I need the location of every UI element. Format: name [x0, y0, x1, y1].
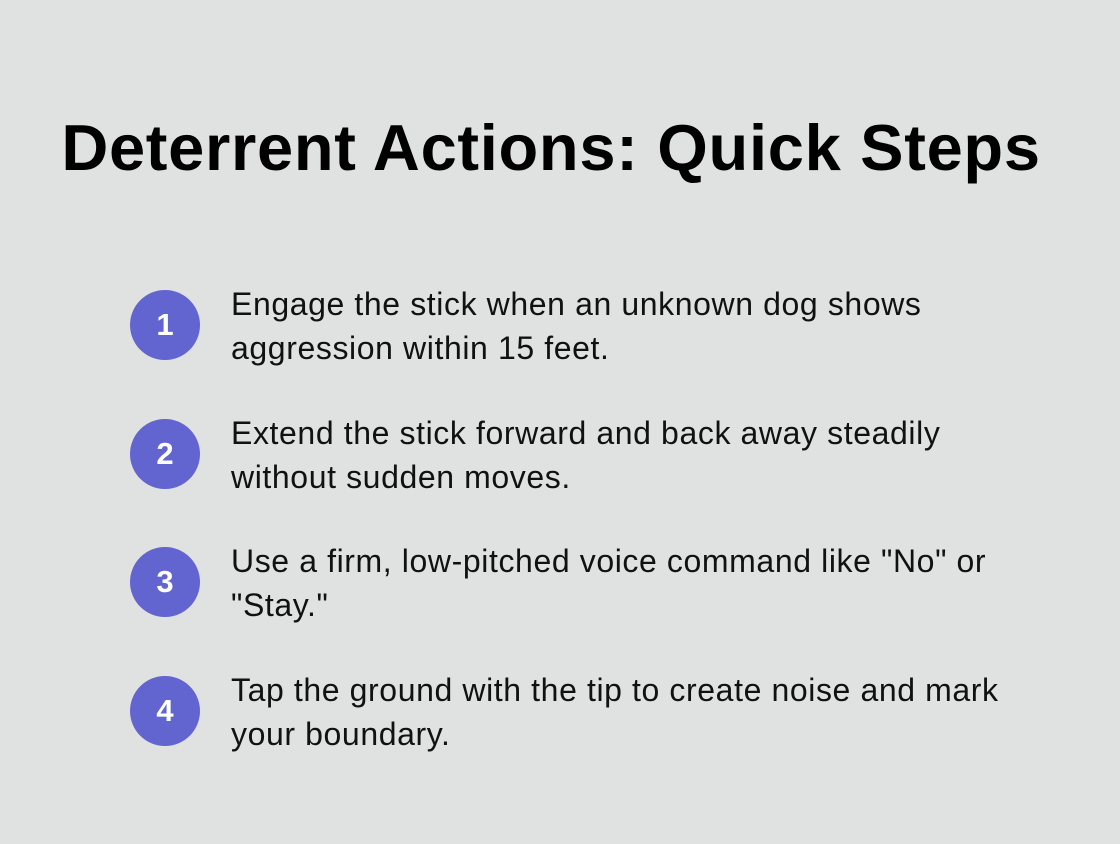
- icon: number 4: [130, 676, 200, 746]
- icon: number 2: [130, 419, 200, 489]
- text step 2: without sudden moves.: [231, 459, 571, 495]
- icon: number 3: [130, 547, 200, 617]
- text step 3: Use a firm, low-pitched voice command like "No" or: [231, 543, 986, 579]
- text step 1: Engage the stick when an unknown dog shows: [231, 286, 922, 322]
- text step 4: your boundary.: [231, 716, 450, 752]
- text step 1: aggression within 15 feet.: [231, 330, 610, 366]
- text step 4: Tap the ground with the tip to create noise and mark: [231, 672, 999, 708]
- step 2: [130, 415, 940, 495]
- text step 1: [231, 286, 922, 366]
- title: Deterrent Actions: Quick Steps: [61, 111, 1041, 184]
- text step 2: [231, 415, 940, 495]
- text step 3: [231, 543, 986, 623]
- icon: number 1: 1: [156, 307, 174, 342]
- step 4: [130, 672, 999, 752]
- icon: number 2: 2: [156, 436, 174, 471]
- text step 2: Extend the stick forward and back away steadily: [231, 415, 940, 451]
- text step 4: [231, 672, 999, 752]
- icon: number 4: 4: [156, 693, 174, 728]
- step 1: [130, 286, 922, 366]
- step 3: [130, 543, 986, 623]
- icon: number 3: 3: [156, 564, 174, 599]
- icon: number 1: [130, 290, 200, 360]
- text step 3: "Stay.": [231, 587, 328, 623]
